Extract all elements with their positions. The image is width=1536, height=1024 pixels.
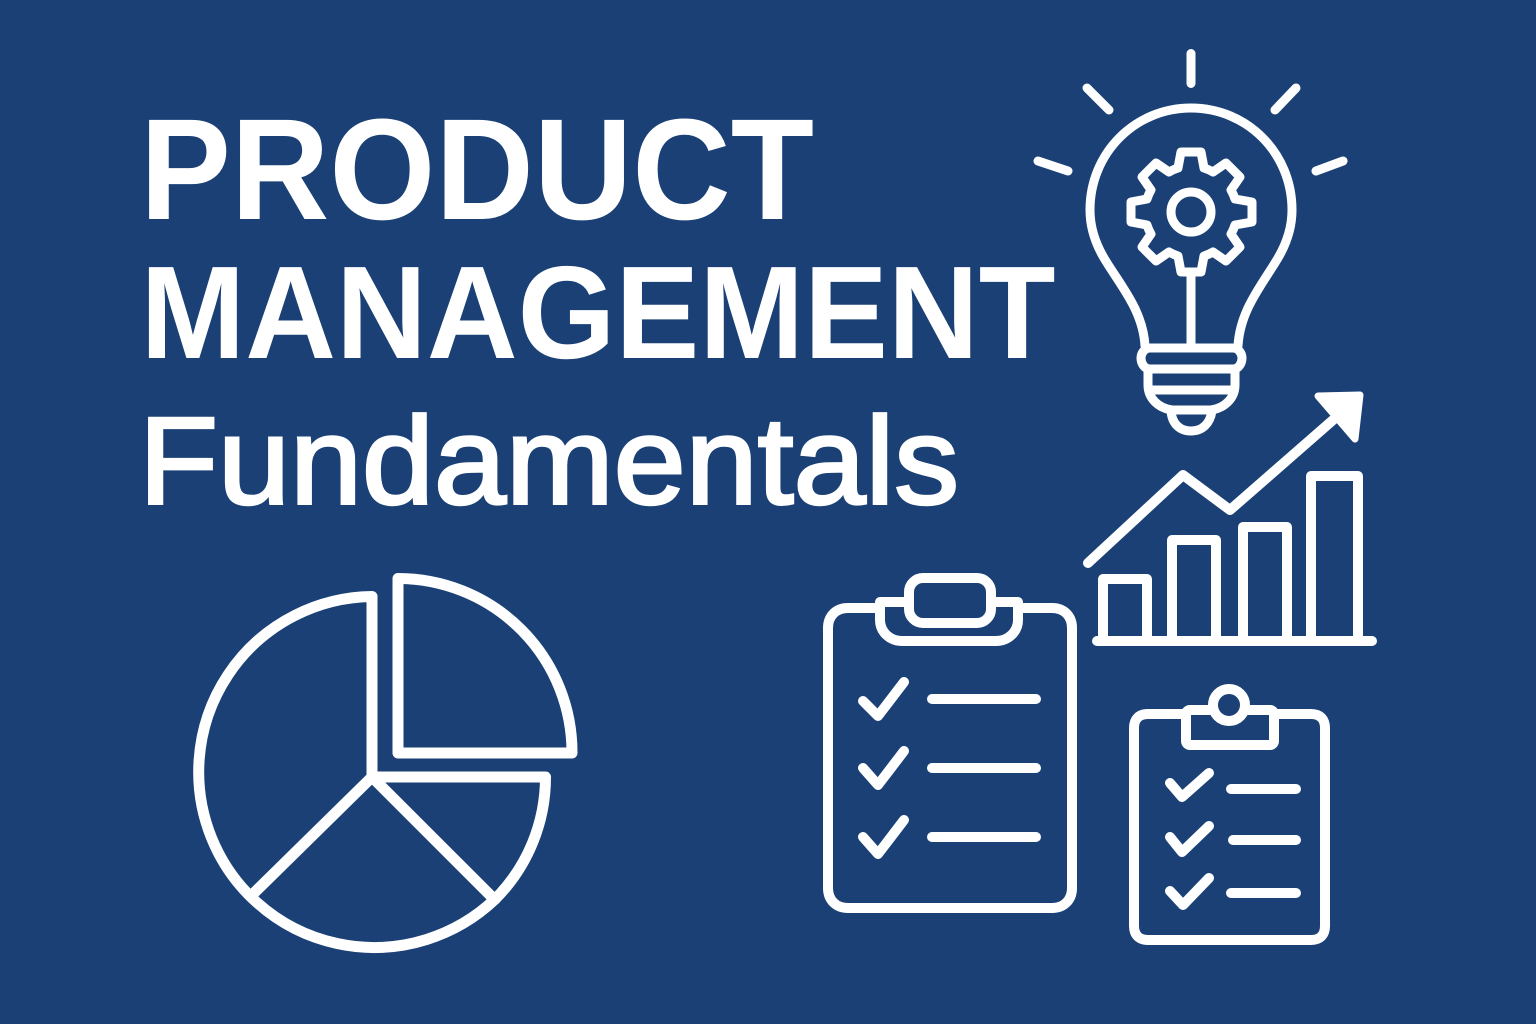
icon: growth bar chart bbox=[1088, 395, 1372, 641]
title bbox=[139, 89, 1056, 530]
icon: small clipboard checklist bbox=[1134, 689, 1325, 940]
title line: PRODUCT: PRODUCT bbox=[140, 89, 814, 250]
checks bbox=[1170, 773, 1209, 905]
lower right slice bbox=[372, 777, 546, 899]
bulb rays bbox=[1038, 54, 1343, 171]
vertical divider bbox=[366, 597, 378, 777]
bulb stem bbox=[1186, 276, 1196, 348]
bars bbox=[1103, 476, 1358, 640]
clip base bbox=[880, 602, 1018, 641]
arrow head bbox=[1318, 395, 1360, 439]
bulb tip bbox=[1171, 411, 1212, 431]
icon: large clipboard checklist bbox=[828, 578, 1072, 908]
bulb outline bbox=[1090, 108, 1292, 346]
icon: pie chart bbox=[199, 578, 572, 947]
clip bbox=[1186, 710, 1274, 745]
bulb socket bbox=[1141, 348, 1242, 369]
detached quarter slice bbox=[398, 578, 572, 753]
bulb base bbox=[1148, 369, 1235, 410]
baseline bbox=[1097, 636, 1372, 646]
gear bbox=[1131, 152, 1252, 272]
trend line bbox=[1088, 420, 1333, 563]
title line: Fundamentals: Fundamentals bbox=[139, 392, 959, 530]
main pie outline bbox=[199, 596, 495, 947]
board bbox=[828, 608, 1072, 908]
lower right spoke bbox=[372, 777, 491, 896]
title line: MANAGEMENT: MANAGEMENT bbox=[140, 239, 1056, 386]
gear hub bbox=[1171, 192, 1211, 232]
icon: light bulb with gear bbox=[1038, 54, 1343, 431]
board bbox=[1134, 714, 1325, 940]
lower left spoke bbox=[254, 777, 372, 893]
checks bbox=[863, 682, 904, 854]
lines bbox=[1231, 789, 1296, 893]
lines bbox=[932, 699, 1036, 837]
clip ring bbox=[1213, 689, 1245, 721]
clip tab bbox=[909, 578, 991, 623]
